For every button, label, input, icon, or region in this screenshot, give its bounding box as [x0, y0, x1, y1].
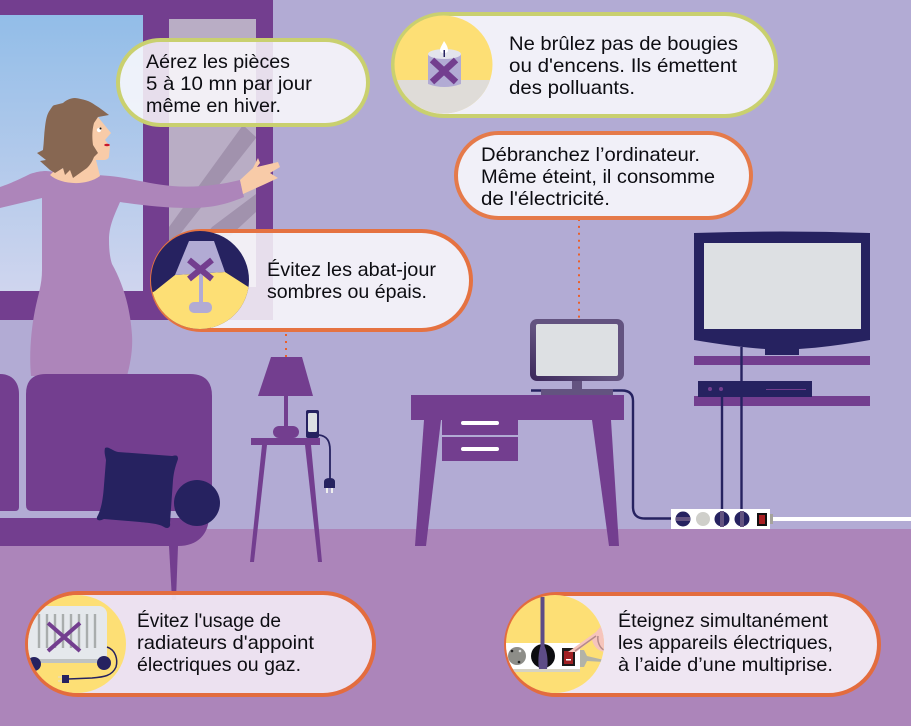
sofa: [0, 374, 220, 600]
text: abat-jour: sombres ou épais.: [267, 281, 427, 303]
text: bougies: ou d'encens. Ils émettent: [509, 55, 738, 77]
television: [694, 232, 870, 355]
computer monitor: [530, 319, 624, 395]
computer cable: [531, 390, 678, 518]
dotted line: lamp: [285, 334, 287, 357]
icon: candle: [394, 16, 492, 114]
callout: abat-jour: [148, 228, 471, 340]
dotted line: computer: [578, 219, 580, 319]
phone charger: [306, 410, 335, 493]
text: ordinateur: de l'électricité.: [481, 188, 610, 210]
text: bougies: [509, 33, 738, 99]
table: [250, 438, 322, 562]
callout: multiprise: [503, 592, 879, 696]
callout: bougies: [390, 10, 776, 120]
text: multiprise: à l’aide d’une multiprise.: [618, 654, 833, 676]
text: radiateurs: électriques ou gaz.: [137, 654, 301, 676]
dress: [0, 171, 244, 376]
text: ordinateur: Même éteint, il consomme: [481, 166, 715, 188]
hand: [240, 158, 280, 194]
callout: ordinateur: [456, 133, 751, 218]
desk: [411, 395, 624, 546]
text: radiateurs: radiateurs d'appoint: [137, 632, 315, 654]
text: multiprise: [618, 609, 833, 676]
hair: [37, 98, 109, 178]
text: bougies: Ne brûlez pas de bougies: [509, 33, 738, 55]
tv cables: [722, 347, 742, 512]
text: aérez: [146, 51, 313, 117]
text: aérez: 5 à 10 mn par jour: [146, 73, 313, 95]
icon: power strip and hand: [506, 595, 604, 693]
woman: [0, 98, 280, 376]
text: abat-jour: [267, 258, 437, 303]
text: abat-jour: Évitez les abat-jour: [267, 258, 437, 281]
wall background: [0, 0, 911, 529]
icon: lamp: [151, 231, 249, 329]
callout: aérez: [118, 40, 368, 125]
text: bougies: des polluants.: [509, 77, 635, 99]
icon: radiator: [28, 595, 126, 693]
text: radiateurs: Évitez l'usage de: [137, 609, 281, 632]
floor: [0, 529, 911, 726]
text: ordinateur: Débranchez l’ordinateur.: [481, 144, 700, 166]
text: radiateurs: [137, 609, 315, 676]
window: [0, 0, 273, 320]
lips and eye: [97, 128, 110, 146]
callout: radiateurs: [22, 592, 374, 696]
lamp: [258, 357, 313, 438]
text: aérez: même en hiver.: [146, 95, 281, 117]
cushion: [97, 448, 178, 528]
skin: [50, 117, 111, 183]
text: aérez: Aérez les pièces: [146, 51, 290, 73]
text: ordinateur: [481, 144, 715, 210]
text: multiprise: Éteignez simultanément: [618, 609, 829, 632]
armrest circle: [174, 480, 220, 526]
text: multiprise: les appareils électriques,: [618, 632, 833, 654]
shelves and tv box: [694, 356, 870, 406]
power strip: [671, 509, 911, 529]
bedside table with lamp and phone charger: [250, 357, 335, 562]
